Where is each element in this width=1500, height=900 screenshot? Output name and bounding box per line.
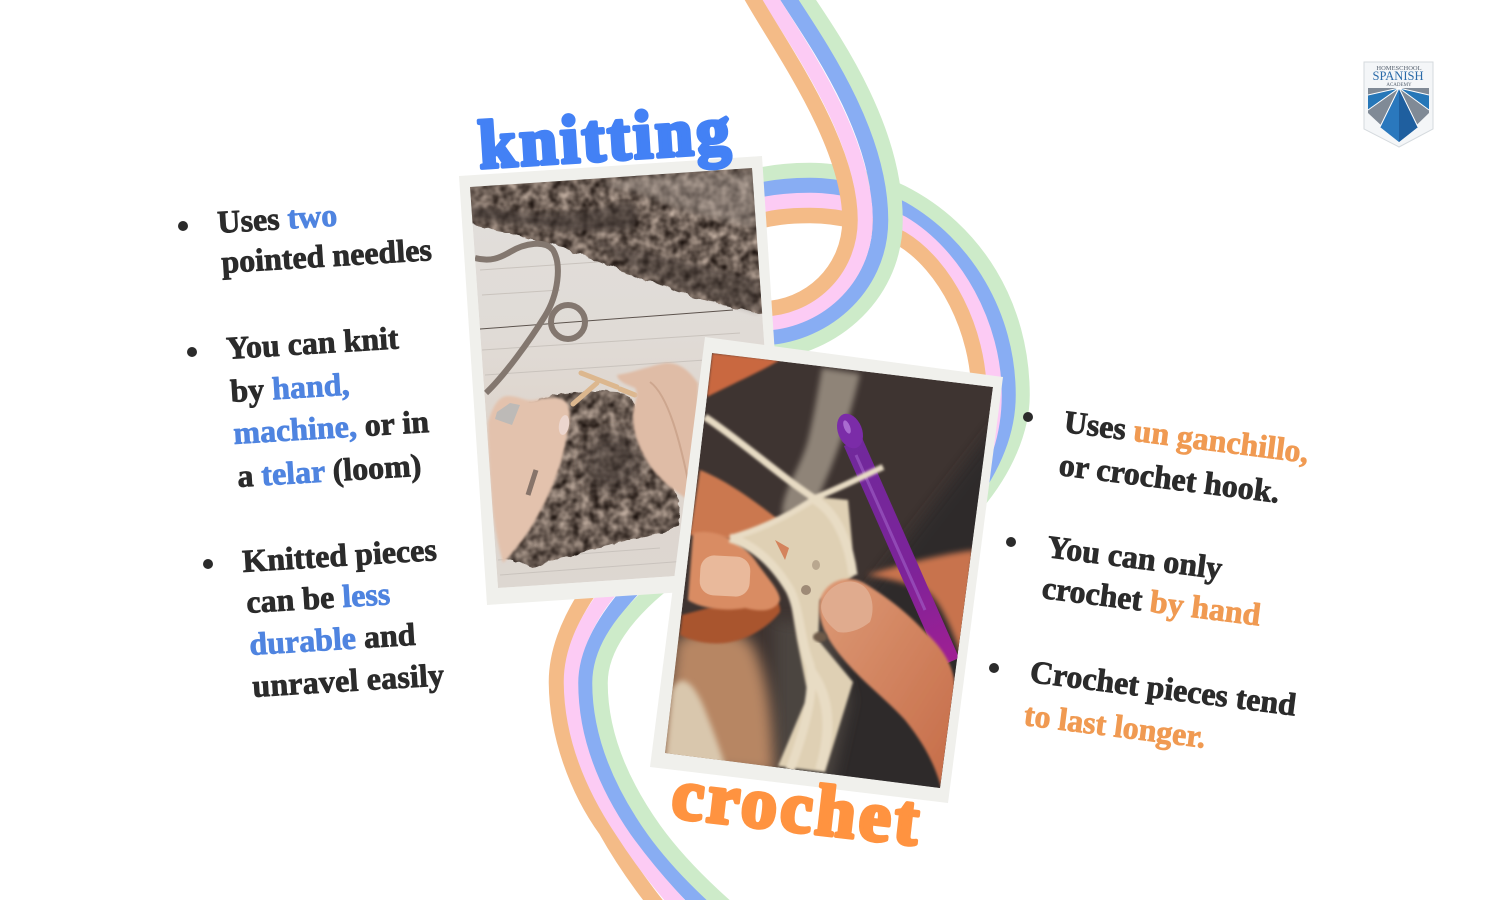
- right hand: [617, 363, 698, 505]
- bullet: by hand: [1006, 528, 1263, 633]
- needles: [573, 373, 635, 404]
- bullet: less durable: durable and: [248, 616, 417, 662]
- logo: Homeschool Spanish Academy shield: HOMESCHOOL: [1376, 65, 1422, 72]
- bullet: by hand: crochet by hand: [1040, 569, 1263, 633]
- bullet: two pointed needles: pointed needles: [220, 231, 433, 280]
- bottom left blurred yarn: [665, 678, 727, 760]
- top knitted scarf: [470, 168, 762, 314]
- bullet: by hand: You can only: [1045, 528, 1224, 586]
- rainbow ribbon: lower left sweep: [556, 565, 735, 900]
- rainbow ribbon: big right arc: [750, 170, 1022, 505]
- bullet: hand, machine, telar: [187, 320, 430, 494]
- bullet: ganchillo: [1023, 403, 1311, 510]
- logo: Homeschool Spanish Academy shield: SPANISH: [1373, 69, 1423, 83]
- bullet: lasts longer: Crochet pieces tend: [1028, 653, 1299, 723]
- left fingers: [690, 468, 777, 540]
- crochet hook: [853, 442, 950, 662]
- left hand: [488, 396, 570, 563]
- heading: crochet: crochet: [668, 753, 927, 861]
- heading: knitting: knitting: [476, 91, 735, 183]
- bullet: lasts longer: to last longer.: [1022, 696, 1208, 755]
- bullet: less durable: unravel easily: [251, 656, 445, 704]
- bullet: two pointed needles: Uses two: [216, 197, 338, 240]
- yarn strand: [475, 244, 558, 393]
- logo: Homeschool Spanish Academy shield: [1364, 62, 1433, 147]
- yarn net: [705, 417, 883, 772]
- yarn holes: [775, 540, 820, 595]
- right thumb: [819, 579, 955, 790]
- photo: hands knitting grey yarn: [459, 155, 790, 605]
- bullet: hand, machine, telar: machine, or in: [232, 403, 430, 451]
- knitting bullet list: [178, 197, 445, 704]
- blurred background strip: [782, 368, 860, 515]
- bullet: lasts longer: [989, 653, 1299, 755]
- bullet: two pointed needles: [178, 197, 433, 280]
- bullet: hand, machine, telar: by hand,: [229, 366, 350, 409]
- top corner finger: [707, 353, 780, 397]
- bullet: less durable: can be less: [245, 575, 391, 620]
- rainbow ribbon: top loop: [748, 0, 895, 352]
- bullet: ganchillo: Uses un ganchillo,: [1062, 403, 1311, 470]
- bullet: hand, machine, telar: You can knit: [225, 320, 400, 366]
- bullet: less durable: Knitted pieces: [241, 531, 438, 579]
- bullet: ganchillo: or crochet hook.: [1057, 446, 1282, 510]
- lower knitted piece: [505, 391, 680, 567]
- photo: hands crocheting cream yarn with purple hook: [650, 337, 1003, 803]
- right hand fingers: [867, 550, 975, 665]
- crochet bullet list: [989, 403, 1311, 755]
- logo: Homeschool Spanish Academy shield: ACADEMY: [1386, 83, 1412, 88]
- bullet: hand, machine, telar: a telar (loom): [236, 447, 422, 494]
- bullet: less durable: [203, 531, 445, 704]
